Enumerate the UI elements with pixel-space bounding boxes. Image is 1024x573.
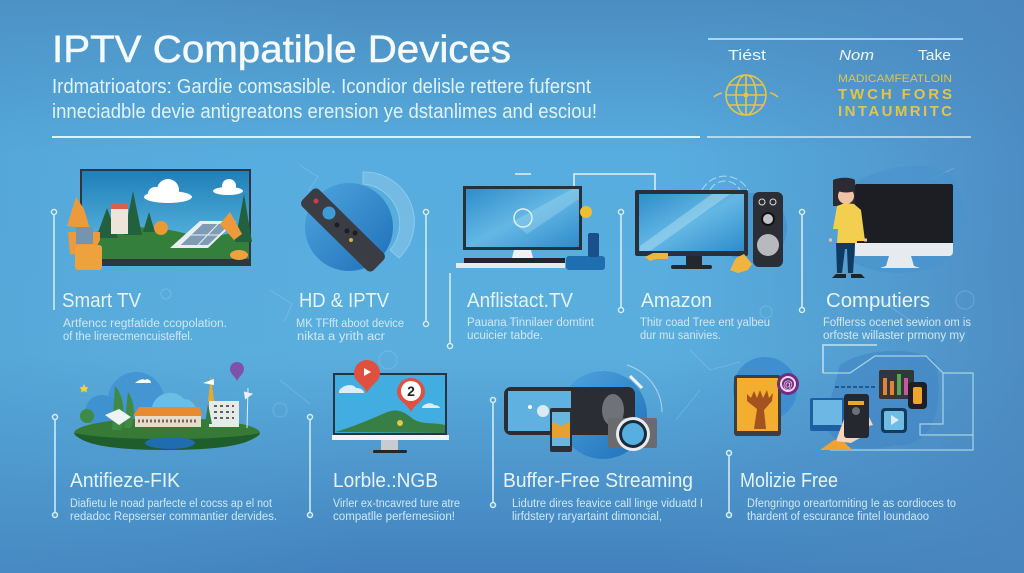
intro text: inneciadble devie antigreatons erension ye dstanlimes and esciou! — [52, 101, 597, 123]
description: Fofflerss ocenet sewion om is — [823, 317, 971, 329]
description — [70, 498, 277, 523]
icon: globe — [714, 75, 778, 115]
heading: HD & IPTV — [299, 290, 390, 312]
title: IPTV Compatible Devices — [52, 29, 511, 71]
description: ucuicier tabde. — [467, 330, 543, 342]
icon: monitor with map pins: 2 — [407, 383, 415, 399]
icon: remote control — [299, 172, 414, 274]
heading: Computiers — [826, 290, 930, 312]
column labels: Nom — [839, 47, 874, 64]
description: nikta a yrith acr — [297, 331, 385, 343]
description — [823, 317, 971, 342]
heading: Buffer-Free Streaming — [503, 470, 693, 492]
description: MK TFfft aboot device — [296, 318, 404, 330]
icon: monitor with dock — [456, 174, 655, 270]
panel: Computiers — [800, 166, 971, 342]
description: Diafietu le noad parfecte el cocss ap el not — [70, 498, 273, 510]
panel: Smart TV — [52, 169, 252, 343]
yellow callout text: INTAUMRITC — [838, 103, 952, 120]
description — [747, 498, 956, 523]
icon: smart TV — [67, 169, 252, 270]
panel: Antifieze-FIK — [52, 362, 277, 523]
panel: Lorble.:NGB — [308, 360, 460, 523]
yellow callout text — [838, 73, 952, 120]
description: Pauana Tinnilaer domtint — [467, 317, 595, 329]
description: Virler ex-tncavred ture atre — [333, 498, 460, 510]
description: orfoste willaster prmony my — [823, 330, 965, 342]
description — [467, 317, 595, 342]
description: thardent of escurance fintel loundaoo — [747, 511, 929, 523]
column labels — [728, 47, 951, 64]
column labels: Tiést — [728, 47, 767, 64]
description: Dfengringo oreartorniting Ie as cordioces to — [747, 498, 956, 510]
icon: floating island campus — [74, 362, 260, 450]
heading: Anflistact.TV — [467, 290, 574, 312]
yellow callout text: TWCH FORS — [838, 86, 952, 103]
description — [512, 498, 703, 523]
panel: Amazon — [618, 176, 787, 342]
panel: HD & IPTV — [296, 172, 428, 343]
icon: tablet with tree — [733, 357, 799, 436]
yellow callout text: MADICAMFEATLOIN — [838, 73, 952, 85]
description — [640, 317, 770, 342]
header divider — [52, 136, 700, 138]
icon: person with computer — [829, 166, 962, 278]
description: of the lirerecmencuisteffel. — [63, 331, 193, 343]
description: compatlle perfemesiion! — [333, 511, 455, 523]
column labels: Take — [918, 47, 951, 64]
intro text — [52, 76, 597, 123]
description: Lidutre dires feavice call linge viduatd I — [512, 498, 703, 510]
description — [333, 498, 460, 523]
panel: Molizie Free — [726, 345, 973, 523]
description: dur mu sanivies. — [640, 330, 721, 342]
icon: tablet with tree: @ — [783, 380, 793, 391]
heading: Molizie Free — [740, 470, 838, 492]
circuit lines and app cluster — [810, 345, 973, 450]
heading: Antifieze-FIK — [70, 470, 181, 492]
icon: devices and camera — [504, 365, 662, 459]
intro text: Irdmatrioators: Gardie comsasible. Icondior delisle rettere fufersnt — [52, 76, 591, 98]
description: Artfencc regtfatide ccopolation. — [63, 318, 227, 330]
heading: Lorble.:NGB — [333, 470, 438, 492]
description: redadoc Repserser commantier dervides. — [70, 511, 277, 523]
description — [296, 318, 404, 343]
description: Thitr coad Tree ent yalbeu — [640, 317, 770, 329]
description: lirfdstery raryartaint dimoncial, — [512, 511, 662, 523]
panel: Anflistact.TV — [448, 174, 655, 348]
panel: Buffer-Free Streaming — [490, 365, 703, 523]
heading: Smart TV — [62, 290, 142, 312]
icon: monitor with map pins — [332, 360, 449, 453]
description — [63, 318, 227, 343]
icon: TV with speaker — [635, 176, 787, 273]
heading: Amazon — [641, 290, 712, 312]
panel: header info — [707, 39, 971, 137]
